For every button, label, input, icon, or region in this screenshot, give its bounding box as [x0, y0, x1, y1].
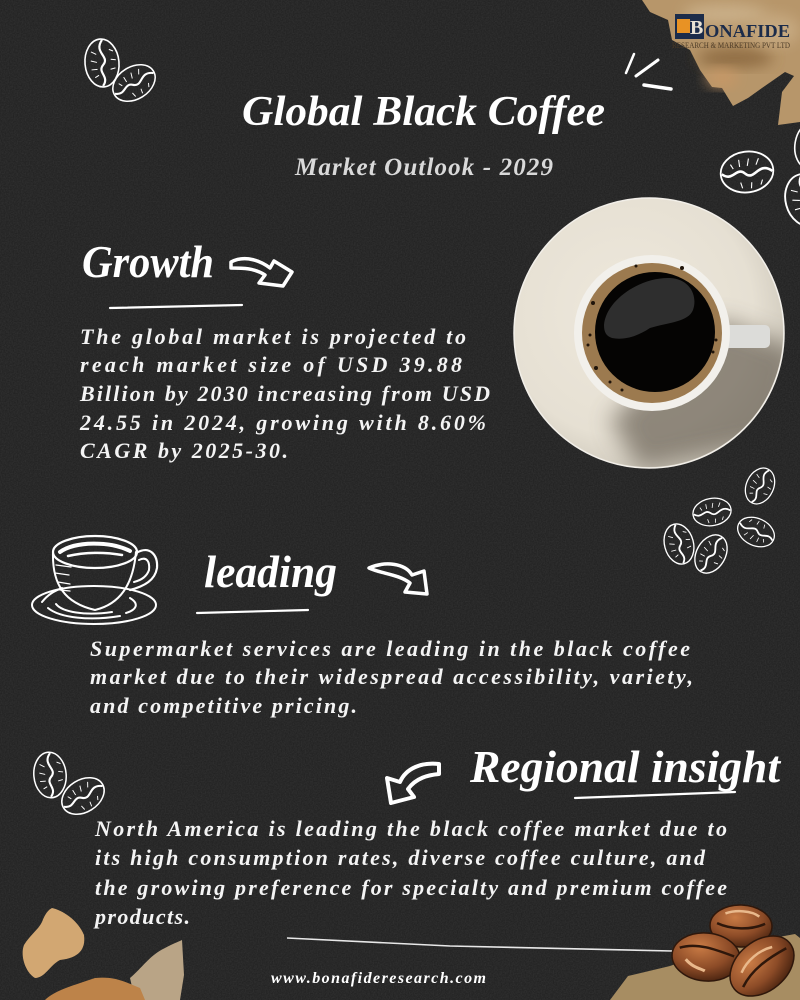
title: Global Black Coffee — [242, 89, 605, 135]
text block: growth: The global market is projected to — [80, 324, 466, 349]
heading: Growth: Growth — [82, 236, 214, 287]
logo: Bonafide Research: ONAFIDE — [705, 21, 790, 41]
arrow: leading — [369, 564, 427, 594]
text block: regional — [93, 816, 727, 929]
photo: black coffee cup on saucer — [514, 198, 800, 470]
text block: leading — [90, 636, 693, 718]
icon: top right coffee beans — [718, 118, 800, 231]
text block: growth: reach market size of USD 39.88 — [80, 352, 462, 377]
icon: brown roasted coffee beans — [670, 904, 800, 1000]
text block: growth: CAGR by 2025-30. — [80, 438, 288, 463]
text block: regional: the growing preference for specialty and premium coffee — [95, 875, 727, 900]
text block: regional: North America is leading the black coffee market due to — [94, 816, 727, 841]
heading: Regional insight: Regional insight — [469, 741, 781, 792]
stain: top right coffee splash — [642, 0, 800, 125]
logo: Bonafide Research: B — [690, 17, 703, 39]
text block: growth: 24.55 in 2024, growing with 8.60% — [79, 410, 486, 435]
text block: leading: and competitive pricing. — [90, 693, 357, 718]
text block: regional: products. — [93, 904, 190, 929]
stain: bottom left coffee splashes — [23, 908, 184, 1000]
icon: chalk coffee cup — [32, 536, 157, 624]
text block: growth: Billion by 2030 increasing from USD — [79, 381, 490, 406]
icon: left coffee beans — [32, 751, 111, 822]
heading: Leading: leading — [204, 546, 337, 597]
text block: regional: its high consumption rates, diverse coffee culture, and — [95, 845, 706, 870]
arrow: regional — [387, 764, 439, 803]
subtitle: Market Outlook - 2029 — [294, 154, 554, 181]
underline: footer divider — [287, 938, 672, 951]
underline: leading — [197, 610, 308, 613]
stain: bottom right burlap — [610, 934, 800, 1000]
icon: top left coffee beans — [83, 38, 162, 109]
text block: leading: market due to their widespread accessibility, variety, — [90, 664, 693, 689]
footer website: www.bonafideresearch.com — [271, 970, 486, 987]
text block: growth — [79, 324, 490, 463]
underline: growth — [110, 305, 242, 308]
underline: regional — [575, 792, 735, 798]
arrow: growth — [231, 259, 292, 286]
text block: leading: Supermarket services are leading in the black coffee — [90, 636, 690, 661]
icon: sparkle strokes — [626, 54, 671, 89]
logo: Bonafide Research — [672, 14, 790, 50]
icon: coffee beans cluster — [660, 463, 780, 579]
